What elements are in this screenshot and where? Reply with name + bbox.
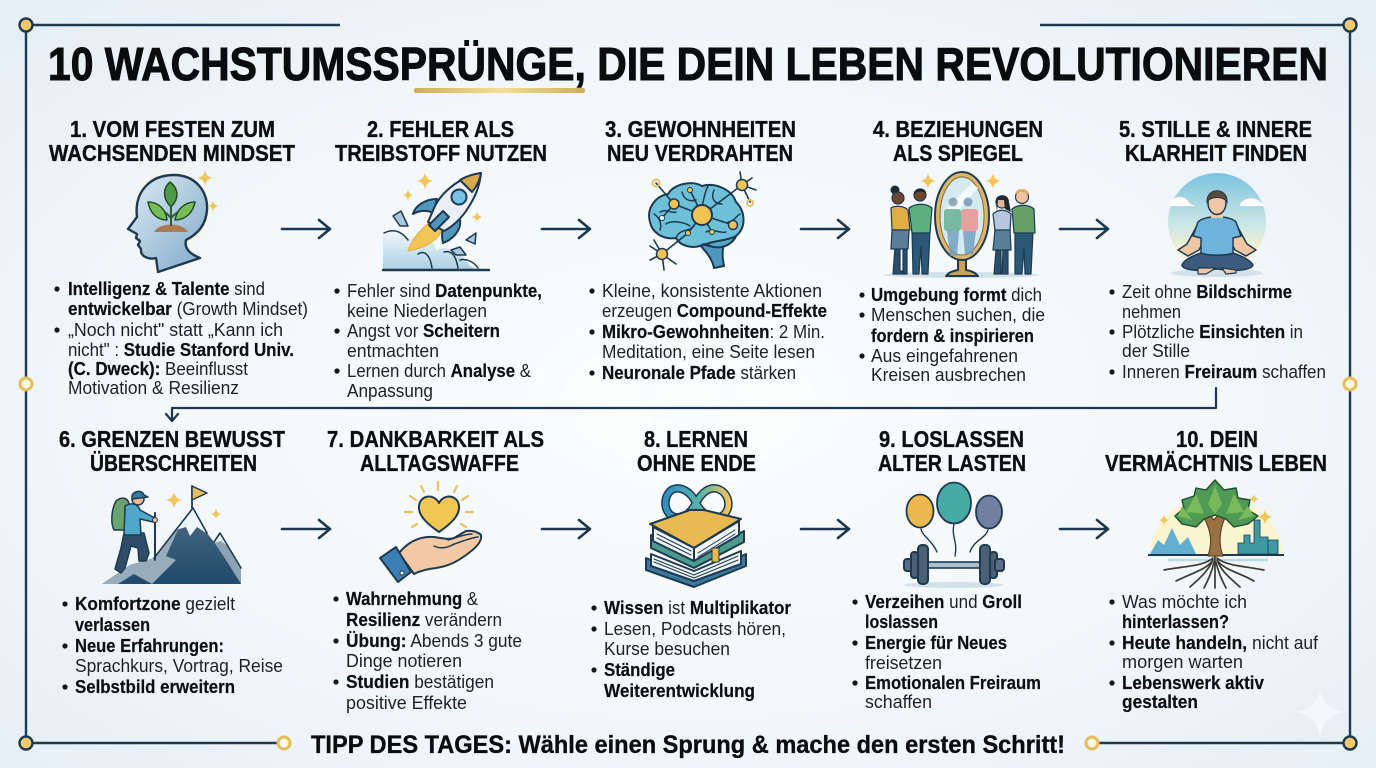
text: step 8 bullets	[591, 598, 791, 701]
person four	[1012, 189, 1035, 274]
arrow: 1 to 2	[282, 220, 330, 238]
icon: rocket	[383, 172, 489, 270]
heading: step 9	[878, 426, 1026, 476]
text: step 2 bullets: Fehler sind Datenpunkte,	[347, 281, 542, 301]
heading: step 8	[637, 426, 756, 476]
text: step 8 bullets: Wissen ist Multiplikator	[604, 598, 791, 618]
icon: hand holding heart	[380, 482, 481, 582]
icon: brain network	[649, 172, 756, 270]
arrow: 2 to 3	[542, 220, 590, 238]
icon: meditating person	[1168, 173, 1266, 277]
icon: head with sprout	[128, 166, 218, 272]
text: step 4 bullets: fordern & inspirieren	[871, 326, 1034, 346]
heading: step 6: ÜBERSCHREITEN	[90, 450, 257, 476]
heading: step 2: 2. FEHLER ALS	[367, 116, 514, 142]
text: step 9 bullets: Energie für Neues	[865, 633, 1007, 653]
text: step 4 bullets: Umgebung formt dich	[871, 285, 1042, 305]
text: step 8 bullets: Weiterentwicklung	[604, 681, 755, 701]
text: step 1 bullets: entwickelbar (Growth Mindset)	[68, 299, 308, 319]
text: step 2 bullets: Anpassung	[347, 381, 433, 401]
icon: watermark sparkle	[1295, 688, 1345, 738]
text: step 10 bullets: morgen warten	[1122, 652, 1243, 672]
text: step 8 bullets: Kurse besuchen	[604, 639, 730, 659]
text: step 3 bullets: Mikro-Gewohnheiten: 2 Min.	[602, 322, 825, 342]
text: step 5 bullets: Zeit ohne Bildschirme	[1122, 282, 1292, 302]
text: step 5 bullets: Plötzliche Einsichten in	[1122, 322, 1303, 342]
text: step 6 bullets: Selbstbild erweitern	[75, 677, 235, 697]
heading: step 3: 3. GEWOHNHEITEN	[605, 116, 796, 142]
text: step 2 bullets: Angst vor Scheitern	[347, 321, 500, 341]
text: step 7 bullets	[333, 589, 522, 713]
text: step 1 bullets: nicht" : Studie Stanford Univ.	[68, 340, 294, 360]
icon: people and mirror	[883, 172, 1039, 278]
text: step 10 bullets: Heute handeln, nicht auf	[1122, 633, 1319, 653]
text: step 9 bullets	[852, 592, 1041, 712]
text: step 9 bullets: freisetzen	[865, 653, 942, 673]
heading: step 10: 10. DEIN	[1176, 426, 1258, 452]
heading: step 1: WACHSENDEN MINDSET	[49, 140, 295, 166]
panel: step 7 gratitude	[327, 426, 544, 713]
heading: step 6	[59, 426, 285, 476]
text: step 2 bullets: keine Niederlagen	[347, 301, 487, 321]
person two	[909, 189, 932, 274]
heading: step 4: ALS SPIEGEL	[893, 140, 1023, 166]
text: step 5 bullets: Inneren Freiraum schaffen	[1122, 362, 1326, 382]
heading: step 7	[327, 426, 544, 476]
panel: step 9 letting go	[852, 426, 1041, 712]
text: step 4 bullets: Kreisen ausbrechen	[871, 365, 1026, 385]
callout: tip of the day: TIPP DES TAGES: Wähle einen Sprung & mache den ersten Schritt!	[311, 731, 1065, 759]
panel: step 4 relationships	[859, 116, 1045, 385]
text: step 10 bullets: Was möchte ich	[1122, 592, 1247, 612]
text: step 6 bullets: Neue Erfahrungen:	[75, 636, 224, 656]
text: step 9 bullets: loslassen	[865, 612, 938, 632]
panel: step 1 mindset	[49, 116, 308, 398]
panel: step 3 habits	[589, 116, 827, 383]
heading: step 4	[873, 116, 1043, 166]
icon: climber on mountain	[102, 486, 241, 584]
panel: step 2 errors	[334, 116, 547, 401]
text: step 6 bullets: Komfortzone gezielt	[75, 594, 235, 614]
heading: step 9: ALTER LASTEN	[878, 450, 1026, 476]
text: step 9 bullets: Verzeihen und Groll	[865, 592, 1022, 612]
text: step 1 bullets: Intelligenz & Talente sind	[68, 279, 265, 299]
text: step 3 bullets: Kleine, konsistente Aktionen	[602, 281, 822, 301]
text: step 10 bullets: hinterlassen?	[1122, 612, 1229, 632]
arrow: connector row 1 to row 2	[166, 388, 1216, 421]
heading: step 10	[1105, 426, 1327, 476]
text: step 2 bullets: entmachten	[347, 341, 439, 361]
heading: step 3: NEU VERDRAHTEN	[607, 140, 793, 166]
icon: balloons and dumbbell	[904, 482, 1004, 588]
text: step 10 bullets: Lebenswerk aktiv	[1122, 673, 1264, 693]
text: step 2 bullets	[334, 281, 542, 401]
text: step 7 bullets: positive Effekte	[346, 693, 467, 713]
text: step 7 bullets: Studien bestätigen	[346, 672, 494, 692]
text: step 1 bullets: Motivation & Resilienz	[68, 378, 239, 398]
arrow: 4 to 5	[1060, 220, 1108, 238]
text: step 8 bullets: Ständige	[604, 660, 675, 680]
heading: step 2	[335, 116, 547, 166]
text: step 5 bullets	[1109, 282, 1326, 382]
text: step 4 bullets: Menschen suchen, die	[871, 305, 1045, 325]
person three	[993, 195, 1011, 274]
panel: step 5 stillness	[1109, 116, 1326, 382]
heading: step 1: 1. VOM FESTEN ZUM	[70, 116, 275, 142]
text: step 2 bullets: Lernen durch Analyse &	[347, 361, 531, 381]
arrow: 8 to 9	[801, 520, 849, 538]
heading: step 8: 8. LERNEN	[644, 426, 748, 452]
text: step 5 bullets: der Stille	[1122, 341, 1190, 361]
panel: step 10 legacy	[1105, 426, 1327, 712]
text: step 3 bullets: erzeugen Compound-Effekte	[602, 301, 827, 321]
icon: books with infinity	[646, 488, 746, 587]
text: step 9 bullets: schaffen	[865, 692, 932, 712]
heading: step 5	[1119, 116, 1312, 166]
person one	[890, 186, 910, 274]
heading: step 2: TREIBSTOFF NUTZEN	[335, 140, 547, 166]
text: step 6 bullets: verlassen	[75, 615, 150, 635]
heading: step 6: 6. GRENZEN BEWUSST	[59, 426, 285, 452]
text: step 1 bullets: „Noch nicht" statt „Kann ich	[68, 320, 283, 340]
text: step 7 bullets: Übung: Abends 3 gute	[346, 631, 522, 651]
arrow: 3 to 4	[801, 220, 849, 238]
text: step 7 bullets: Dinge notieren	[346, 651, 462, 671]
heading: step 10: VERMÄCHTNIS LEBEN	[1105, 450, 1327, 476]
icon: tree with roots	[1148, 480, 1284, 588]
text: step 6 bullets: Sprachkurs, Vortrag, Reise	[75, 656, 283, 676]
heading: step 5: 5. STILLE & INNERE	[1119, 116, 1312, 142]
text: step 3 bullets: Meditation, eine Seite lesen	[602, 342, 815, 362]
text: step 7 bullets: Resilienz verändern	[346, 610, 502, 630]
arrow: 9 to 10	[1060, 520, 1108, 538]
heading: step 5: KLARHEIT FINDEN	[1125, 140, 1307, 166]
text: step 5 bullets: nehmen	[1122, 302, 1181, 322]
heading: step 7: ALLTAGSWAFFE	[360, 450, 519, 476]
text: step 3 bullets: Neuronale Pfade stärken	[602, 363, 796, 383]
text: step 4 bullets: Aus eingefahrenen	[871, 346, 1018, 366]
arrow: 6 to 7	[282, 520, 330, 538]
heading: step 8: OHNE ENDE	[637, 450, 756, 476]
text: step 6 bullets	[62, 594, 283, 697]
text: step 3 bullets	[589, 281, 827, 383]
text: step 10 bullets: gestalten	[1122, 692, 1198, 712]
panel: step 6 limits	[59, 426, 285, 697]
text: step 7 bullets: Wahrnehmung &	[346, 589, 478, 609]
text: step 1 bullets: (C. Dweck): Beeinflusst	[68, 359, 248, 379]
text: step 4 bullets	[859, 285, 1045, 385]
heading: step 4: 4. BEZIEHUNGEN	[873, 116, 1043, 142]
heading: step 3	[605, 116, 796, 166]
heading: step 1	[49, 116, 295, 166]
text: step 8 bullets: Lesen, Podcasts hören,	[604, 619, 786, 639]
heading: step 7: 7. DANKBARKEIT ALS	[327, 426, 544, 452]
text: step 9 bullets: Emotionalen Freiraum	[865, 673, 1041, 693]
arrow: 7 to 8	[542, 520, 590, 538]
text: step 10 bullets	[1109, 592, 1319, 712]
panel: step 8 learning	[591, 426, 791, 701]
heading: step 9: 9. LOSLASSEN	[879, 426, 1024, 452]
text: step 1 bullets	[54, 279, 308, 398]
